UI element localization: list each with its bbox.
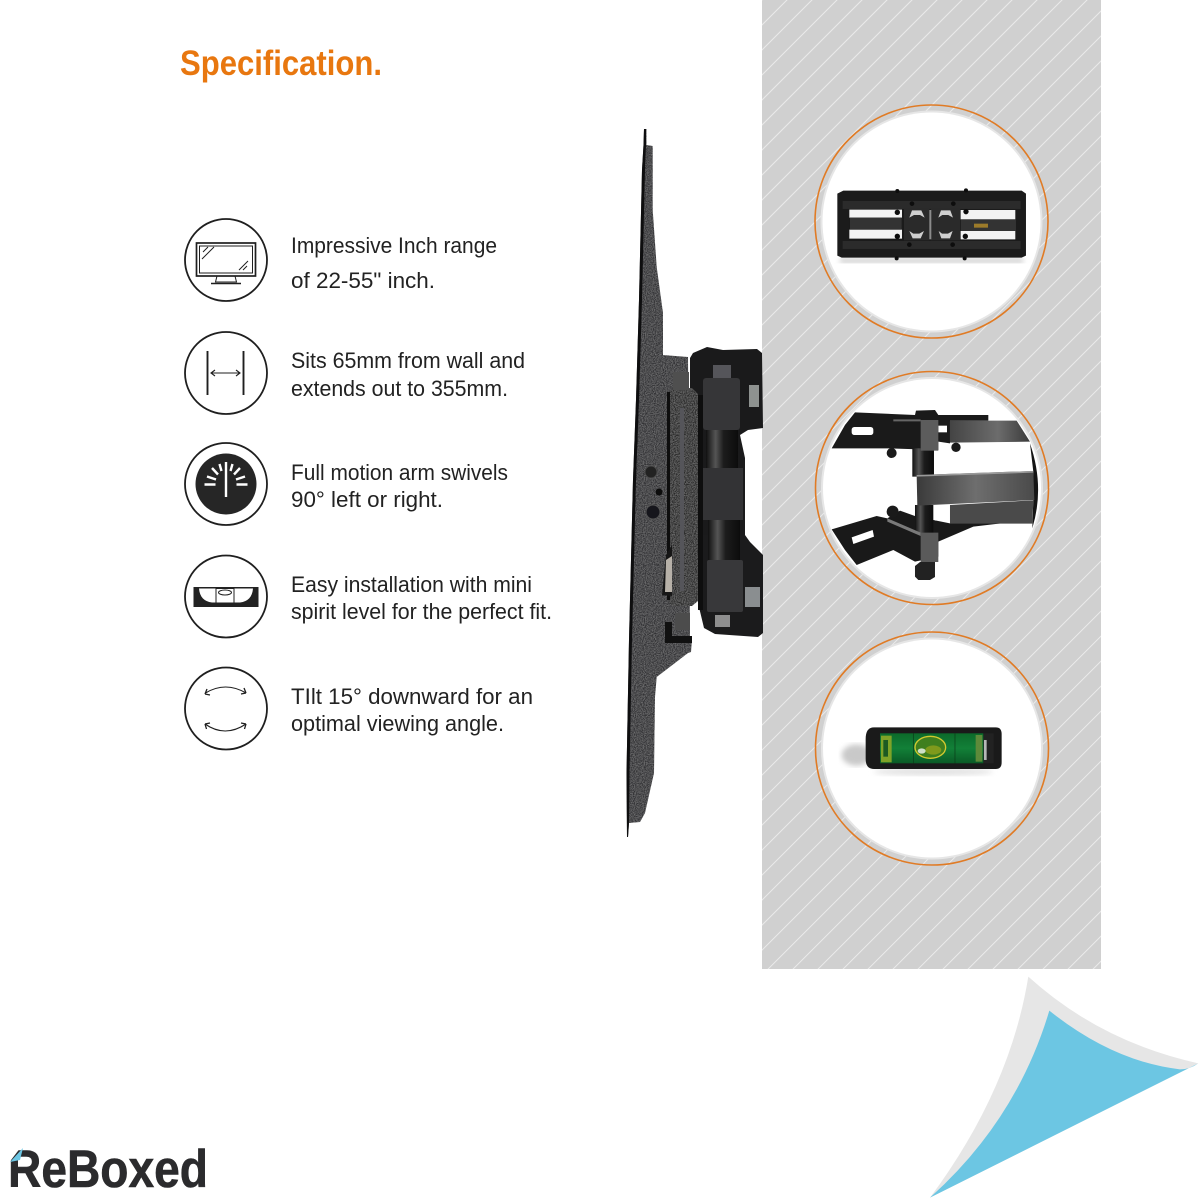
- logo: blue fold: [10, 1148, 23, 1162]
- icon: tilt arrows: [185, 668, 267, 750]
- tilt plate: [626, 129, 692, 837]
- text: tilt: optimal viewing angle.: [291, 711, 504, 736]
- arm photo: [832, 410, 1038, 580]
- text: wall distance: [291, 348, 525, 401]
- text: screen size: Impressive Inch range: [291, 233, 497, 258]
- upper bracket: [690, 347, 763, 540]
- circle: spirit level: [816, 632, 1048, 865]
- text: tilt: TIlt 15° downward for an: [291, 684, 533, 709]
- spec row: tilt: [185, 668, 533, 750]
- icon: monitor: [185, 219, 267, 301]
- lower bracket: [698, 535, 763, 637]
- text: screen size: [291, 233, 497, 293]
- spec row: screen size: [185, 219, 497, 301]
- corner: blue fold: [930, 1011, 1198, 1198]
- grey gap: [662, 545, 672, 596]
- pivot column: [703, 378, 740, 430]
- central rail: [668, 388, 698, 606]
- icon: swivel dial: [185, 443, 267, 525]
- rail bolts: [673, 372, 689, 390]
- text: swivel: 90° left or right.: [291, 487, 443, 512]
- text: screen size: of 22-55" inch.: [291, 268, 435, 293]
- icon: spirit level: [185, 556, 267, 638]
- text: wall distance: extends out to 355mm.: [291, 376, 508, 401]
- spec row: swivel: [185, 443, 508, 525]
- panel: striped grey wall: [762, 0, 1101, 969]
- logo: ReBoxed: ReBoxed: [8, 1140, 208, 1199]
- wall bracket photo: [837, 188, 1026, 263]
- title: Specification.: [180, 44, 382, 83]
- circle: articulated arm: [816, 372, 1048, 604]
- decorative page corner: [930, 977, 1198, 1198]
- text: spirit level: Easy installation with mini: [291, 572, 532, 597]
- spirit level photo: [842, 727, 1002, 776]
- circle: wall bracket: [815, 105, 1048, 338]
- text: wall distance: Sits 65mm from wall and: [291, 348, 525, 373]
- text: spirit level: spirit level for the perfect fit.: [291, 599, 552, 624]
- plate black edge: [626, 129, 646, 837]
- text: spirit level: [291, 572, 552, 624]
- text: swivel: Full motion arm swivels: [291, 460, 508, 485]
- text: swivel: [291, 460, 508, 512]
- mount side view photo: [626, 129, 763, 837]
- text: tilt: [291, 684, 533, 736]
- corner: grey back: [930, 977, 1198, 1198]
- screws: [645, 466, 657, 478]
- icon: width arrows: [185, 332, 267, 414]
- spec row: wall distance: [185, 332, 525, 414]
- spec row: spirit level: [185, 556, 552, 638]
